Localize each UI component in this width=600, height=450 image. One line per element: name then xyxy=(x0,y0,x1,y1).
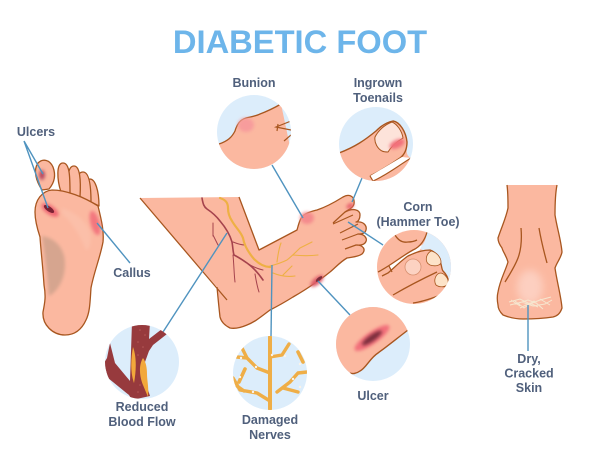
label: Dry, Cracked Skin: Dry, xyxy=(517,352,541,366)
heel highlight xyxy=(517,270,543,304)
label: Corn (Hammer Toe): Corn xyxy=(403,200,433,214)
leader line: heel xyxy=(527,305,529,351)
callus xyxy=(87,210,103,236)
circle: damaged nerves xyxy=(233,336,307,410)
toe lines xyxy=(333,212,358,249)
sole xyxy=(35,190,103,335)
ulcer on ball xyxy=(39,201,61,219)
label: Ulcers: Ulcers xyxy=(17,125,55,139)
label: Dry, Cracked Skin: Cracked xyxy=(504,366,554,380)
circle: blood vessel xyxy=(104,322,179,400)
cracked skin xyxy=(509,297,552,309)
circle: corn hammer toe xyxy=(377,230,451,304)
label: Reduced Blood Flow: Reduced xyxy=(116,400,168,414)
leader lines: side foot xyxy=(163,165,383,337)
label: Damaged Nerves: Nerves xyxy=(249,428,291,442)
label: Reduced Blood Flow: Blood Flow xyxy=(108,415,176,429)
ulcer xyxy=(309,273,325,289)
label: Callus: Callus xyxy=(113,266,151,280)
label: Bunion: Bunion xyxy=(232,76,276,90)
illustration: side foot xyxy=(140,195,366,328)
leg and foot fill xyxy=(140,195,366,328)
label: Damaged Nerves: Damaged xyxy=(242,413,298,427)
nerves xyxy=(220,198,318,276)
circle: ingrown toenail xyxy=(339,107,413,181)
label: Ingrown Toenails: Ingrown xyxy=(354,76,402,90)
arteries xyxy=(202,198,263,292)
ulcer on toe xyxy=(39,170,45,180)
bunion redness xyxy=(300,212,314,224)
title: DIABETIC FOOT xyxy=(173,23,427,60)
circle: bunion xyxy=(217,95,291,169)
label: Dry, Cracked Skin: Skin xyxy=(516,381,542,395)
circle: ulcer xyxy=(336,307,410,381)
foot outline xyxy=(140,195,366,328)
label: Ingrown Toenails: Toenails xyxy=(353,91,403,105)
ball highlight xyxy=(62,208,91,250)
illustration: back of heel xyxy=(497,185,562,319)
label: Corn (Hammer Toe): (Hammer Toe) xyxy=(376,215,460,229)
toes xyxy=(35,160,99,206)
illustration: sole of foot xyxy=(35,160,103,335)
toe redness xyxy=(345,202,355,210)
leader lines: sole xyxy=(24,141,130,263)
arch shadow xyxy=(42,236,65,296)
label: Ulcer: Ulcer xyxy=(357,389,389,403)
